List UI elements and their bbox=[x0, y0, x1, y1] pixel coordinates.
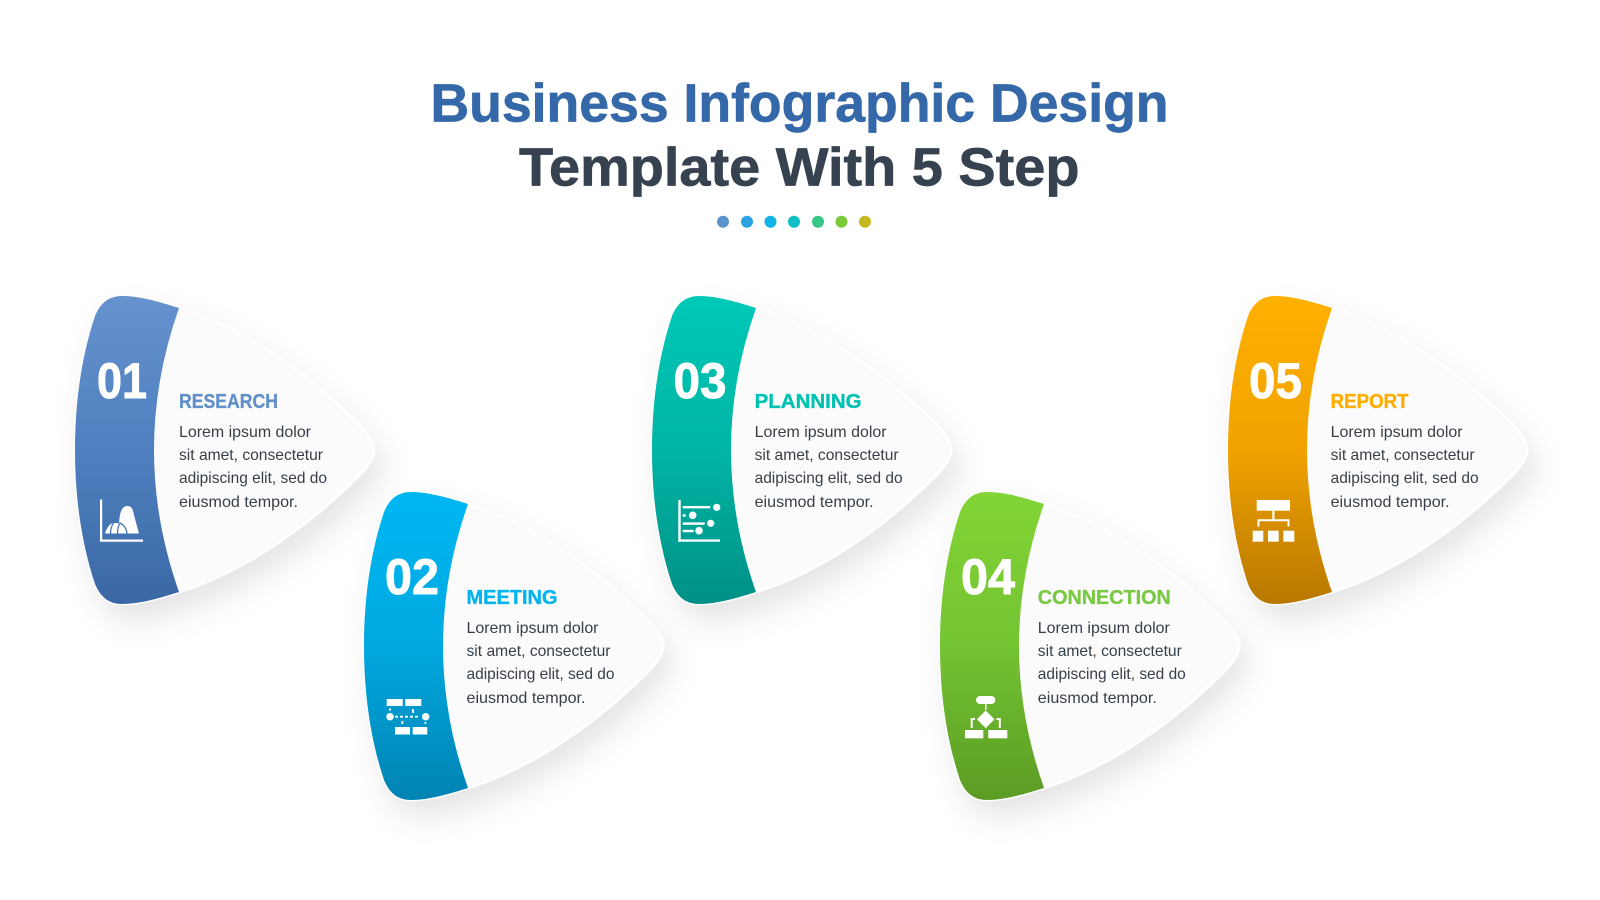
icon: org chart bbox=[1253, 500, 1294, 542]
card shape bbox=[1228, 296, 1527, 604]
decorative colored dots bbox=[717, 216, 871, 228]
body text: eiusmod tempor. bbox=[179, 494, 298, 511]
step number: 05 bbox=[1249, 353, 1302, 409]
panel: step 05 report bbox=[1228, 296, 1527, 604]
body text bbox=[466, 620, 615, 707]
heading: RESEARCH bbox=[179, 391, 278, 413]
step number: 03 bbox=[674, 353, 726, 409]
step number: 04 bbox=[961, 549, 1015, 605]
colored band bbox=[940, 492, 1044, 800]
icon: slider chart bbox=[678, 500, 720, 542]
card shape bbox=[364, 492, 663, 800]
body text: sit amet, consectetur bbox=[466, 643, 610, 660]
icon: flowchart bbox=[965, 696, 1007, 738]
heading: CONNECTION bbox=[1038, 587, 1171, 609]
card shape bbox=[75, 296, 374, 604]
body text: eiusmod tempor. bbox=[1331, 494, 1450, 511]
title line 1: Business Infographic Design bbox=[430, 74, 1168, 134]
body text: adipiscing elit, sed do bbox=[179, 470, 327, 487]
body text bbox=[755, 424, 903, 511]
body text: sit amet, consectetur bbox=[1038, 643, 1182, 660]
panel: step 02 meeting bbox=[364, 492, 663, 800]
colored band bbox=[652, 296, 756, 604]
icon: process blocks bbox=[386, 699, 429, 734]
heading: MEETING bbox=[466, 587, 558, 609]
body text: adipiscing elit, sed do bbox=[1331, 470, 1479, 487]
card shape bbox=[940, 492, 1239, 800]
title bbox=[430, 74, 1168, 198]
card shape bbox=[652, 296, 951, 604]
body text: eiusmod tempor. bbox=[1038, 690, 1157, 707]
colored band bbox=[364, 492, 468, 800]
colored band bbox=[1228, 296, 1332, 604]
icon: area chart bbox=[100, 500, 143, 542]
body text bbox=[179, 424, 327, 511]
body text: eiusmod tempor. bbox=[755, 494, 874, 511]
body text: adipiscing elit, sed do bbox=[1038, 666, 1186, 683]
body text: adipiscing elit, sed do bbox=[755, 470, 903, 487]
body text bbox=[1038, 620, 1186, 707]
body text: eiusmod tempor. bbox=[466, 690, 586, 707]
body text: Lorem ipsum dolor bbox=[1038, 620, 1170, 637]
heading: PLANNING bbox=[755, 391, 862, 413]
panel: step 03 planning bbox=[652, 296, 951, 604]
step number: 02 bbox=[385, 549, 439, 605]
body text: sit amet, consectetur bbox=[179, 447, 323, 464]
body text: sit amet, consectetur bbox=[755, 447, 899, 464]
panel: step 04 connection bbox=[940, 492, 1239, 800]
body text: adipiscing elit, sed do bbox=[466, 666, 615, 683]
heading: REPORT bbox=[1331, 391, 1409, 413]
colored band bbox=[75, 296, 179, 604]
body text bbox=[1331, 424, 1479, 511]
body text: Lorem ipsum dolor bbox=[1331, 424, 1463, 441]
title line 2: Template With 5 Step bbox=[519, 138, 1080, 198]
step number: 01 bbox=[97, 353, 147, 409]
panel: step 01 research bbox=[75, 296, 374, 604]
body text: Lorem ipsum dolor bbox=[179, 424, 311, 441]
body text: Lorem ipsum dolor bbox=[466, 620, 598, 637]
body text: sit amet, consectetur bbox=[1331, 447, 1475, 464]
body text: Lorem ipsum dolor bbox=[755, 424, 887, 441]
